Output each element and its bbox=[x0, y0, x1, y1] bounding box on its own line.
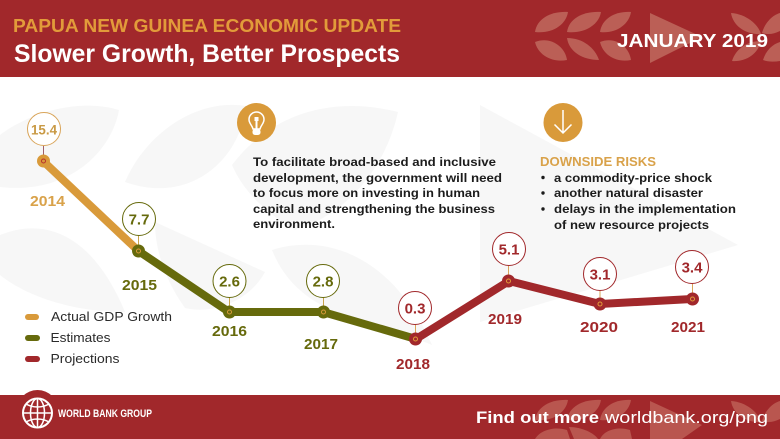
heading: downside risks: DOWNSIDE RISKS bbox=[540, 155, 656, 169]
line: estimates bbox=[138, 251, 416, 339]
risk list bbox=[541, 171, 736, 232]
risk list: a commodity-price shock bbox=[554, 171, 712, 185]
logo text: WORLD BANK GROUP bbox=[58, 408, 152, 420]
text: recommendation: development, the government will need bbox=[253, 171, 502, 185]
point: 2019: 2019 bbox=[488, 311, 522, 328]
point: 2019 bbox=[488, 232, 526, 328]
heading: report name: PAPUA NEW GUINEA ECONOMIC UPDATE bbox=[13, 16, 401, 36]
point: 2018 bbox=[396, 292, 432, 373]
legend: Projections bbox=[50, 351, 120, 366]
point: 2021: 3.4 bbox=[682, 260, 703, 276]
line chart: GDP growth bbox=[28, 112, 708, 373]
date: JANUARY 2019 bbox=[617, 31, 768, 51]
point: 2019: 5.1 bbox=[499, 242, 519, 258]
point: 2015: 7.7 bbox=[129, 212, 149, 228]
point: 2017: 2.8 bbox=[313, 274, 333, 290]
line: actual bbox=[43, 161, 138, 251]
icon: down arrow bbox=[544, 103, 582, 142]
legend: Estimates bbox=[50, 330, 111, 345]
text: recommendation bbox=[253, 155, 502, 231]
point: 2015: 2015 bbox=[122, 277, 157, 294]
text: recommendation: capital and strengthening the business bbox=[253, 202, 495, 216]
text: downside risks bbox=[540, 155, 736, 232]
legend bbox=[25, 309, 172, 366]
point: 2018: 2018 bbox=[396, 356, 430, 373]
risk list: delays in the implementation bbox=[554, 202, 736, 216]
point: 2020 bbox=[580, 258, 618, 336]
footer leaf pattern bbox=[535, 400, 780, 439]
point: 2014: 15.4 bbox=[31, 122, 57, 138]
point: 2016 bbox=[212, 264, 247, 340]
text: recommendation: to focus more on investing in human bbox=[253, 186, 480, 200]
point: 2021: 2021 bbox=[671, 319, 705, 336]
line: projections bbox=[416, 281, 692, 339]
point: 2018: 0.3 bbox=[405, 300, 425, 318]
footer band bbox=[0, 390, 780, 439]
link text: worldbank.org/png bbox=[604, 408, 768, 427]
point: 2016: 2016 bbox=[212, 323, 247, 340]
heading: title: Slower Growth, Better Prospects bbox=[14, 40, 400, 68]
icon: World Bank globe bbox=[16, 390, 58, 432]
point: 2014: 2014 bbox=[30, 193, 66, 210]
call to action: Find out more bbox=[476, 408, 599, 427]
background leaf pattern bbox=[0, 105, 738, 345]
point: 2015 bbox=[122, 202, 157, 294]
point: 2020: 3.1 bbox=[590, 266, 610, 284]
text: recommendation: environment. bbox=[253, 217, 335, 231]
header band bbox=[0, 0, 780, 77]
header leaf pattern bbox=[535, 12, 780, 63]
point: 2020: 2020 bbox=[580, 319, 618, 336]
legend: Actual GDP Growth bbox=[51, 309, 172, 324]
point: 2017 bbox=[304, 264, 340, 353]
point: 2017: 2017 bbox=[304, 336, 338, 353]
icon: light bulb bbox=[237, 103, 276, 142]
point: 2016: 2.6 bbox=[219, 274, 240, 290]
text: recommendation: To facilitate broad-based and inclusive bbox=[253, 155, 496, 169]
risk list: another natural disaster bbox=[554, 186, 703, 200]
point: 2014 bbox=[28, 112, 66, 210]
risk list: of new resource projects bbox=[554, 218, 709, 232]
point: 2021 bbox=[671, 250, 708, 336]
